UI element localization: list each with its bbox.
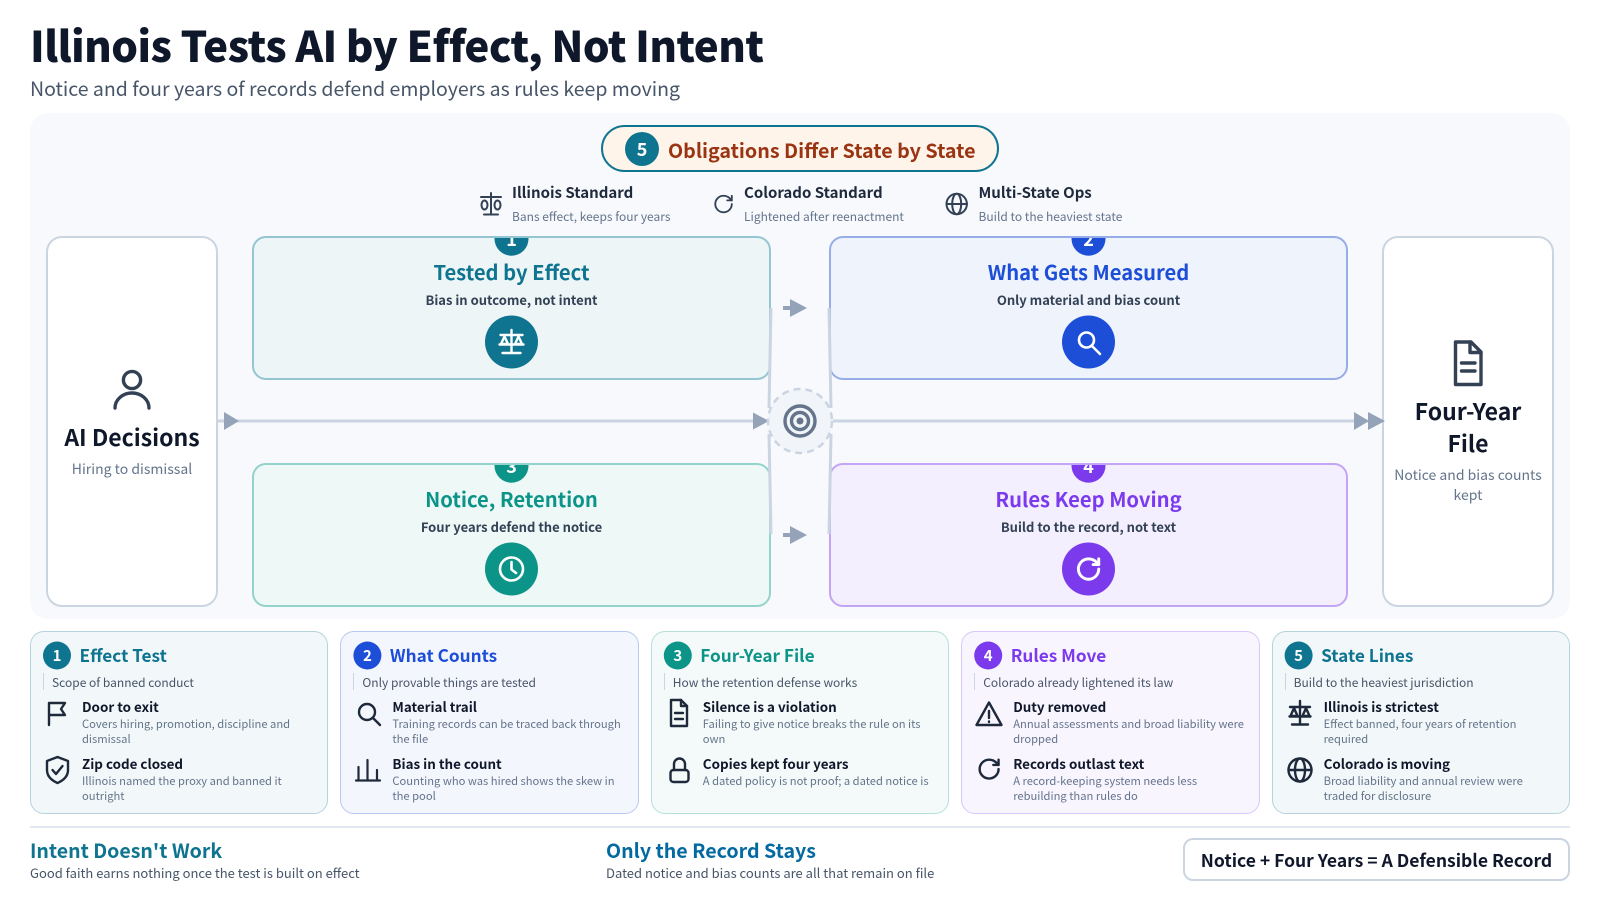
node: four-year file: Four-Year [1415, 393, 1521, 427]
item: Illinois is strictest: Effect banned, four years of retention [1324, 716, 1516, 732]
item: door to exit [48, 696, 290, 747]
panel: 4 rules move: 4 [984, 645, 993, 666]
panel: 1 effect test: Scope of banned conduct [52, 674, 194, 691]
node: four-year file [1382, 236, 1554, 607]
item: duty removed: Annual assessments and broad liability were [1013, 716, 1244, 732]
stage card 1: tested by effect [252, 236, 771, 380]
panel: main diagram [30, 113, 1570, 619]
item: silence is a violation: Silence is a violation [703, 696, 837, 716]
item: material trail: Training records can be traced back through [392, 716, 621, 732]
item: Colorado is moving: Broad liability and annual review were [1324, 773, 1523, 789]
panel: 2 what counts [340, 631, 639, 814]
header pill: obligations differ state by state: Obligations Differ State by State [668, 135, 976, 164]
node: AI decisions: Hiring to dismissal [72, 459, 192, 479]
stage card 4: rules keep moving: Build to the record, not text [1001, 517, 1176, 536]
panel: 4 rules move: Rules Move [1011, 642, 1106, 667]
legend item: Colorado standard [714, 182, 904, 225]
title: Illinois Tests AI by Effect, Not Intent [30, 14, 764, 75]
panel: 3 four-year file: Four-Year File [700, 642, 815, 667]
item: copies kept four years: A dated policy is not proof; a dated notice is [703, 773, 929, 789]
item: Illinois is strictest: required [1324, 731, 1368, 747]
panel: 4 rules move [961, 631, 1260, 814]
item: material trail [358, 696, 621, 747]
panel: 3 four-year file: How the retention defense works [673, 674, 857, 691]
stage card 2: what gets measured: What Gets Measured [988, 257, 1189, 286]
takeaway: only the record stays: Only the Record Stays [606, 835, 816, 864]
stage card 3: notice, retention: Four years defend the notice [421, 517, 602, 536]
item: zip code closed: Zip code closed [82, 753, 183, 773]
item: bias in the count: the pool [392, 788, 436, 804]
item: material trail: the file [392, 731, 428, 747]
takeaway: only the record stays [606, 835, 934, 882]
stage card 3: notice, retention: Notice, Retention [425, 484, 598, 513]
legend item: Colorado standard: Lightened after reenactment [744, 208, 904, 225]
header pill: obligations differ state by state [601, 125, 999, 172]
stage card 4: rules keep moving: Rules Keep Moving [995, 484, 1182, 513]
item: Colorado is moving: traded for disclosure [1324, 788, 1431, 804]
node: AI decisions [46, 236, 218, 607]
legend item: multi-state ops: Multi-State Ops [978, 182, 1092, 203]
stage card 3: notice, retention [252, 463, 771, 607]
takeaway: only the record stays: Dated notice and bias counts are all that remain on file [606, 863, 934, 882]
subtitle: Notice and four years of records defend employers as rules keep moving [30, 73, 680, 102]
item: bias in the count: Counting who was hired shows the skew in [392, 773, 615, 789]
item: copies kept four years [669, 753, 929, 789]
legend item: Illinois standard: Bans effect, keeps four years [512, 208, 670, 225]
stage card 2: what gets measured: Only material and bias count [997, 290, 1180, 309]
node: four-year file: File [1447, 425, 1489, 459]
node: four-year file: kept [1454, 485, 1482, 505]
item: zip code closed [46, 753, 282, 804]
item: material trail: Material trail [392, 696, 477, 716]
panel: 2 what counts: What Counts [390, 642, 497, 667]
callout: formula: Notice + Four Years = A Defensible Record [1201, 848, 1552, 873]
item: door to exit: dismissal [82, 731, 131, 747]
panel: 2 what counts: 2 [363, 645, 372, 666]
item: duty removed [975, 696, 1244, 747]
stage card 1: tested by effect: Tested by Effect [434, 257, 589, 286]
item: bias in the count [354, 753, 615, 804]
item: records outlast text: A record-keeping system needs less [1013, 773, 1197, 789]
item: records outlast text: Records outlast text [1013, 753, 1144, 773]
legend item: multi-state ops: Build to the heaviest state [978, 208, 1122, 225]
panel: 3 four-year file: 3 [673, 645, 682, 666]
node: AI decisions: AI Decisions [64, 419, 200, 453]
item: silence is a violation: Failing to give notice breaks the rule on its [703, 716, 920, 732]
panel: 5 state lines [1272, 631, 1570, 814]
takeaway: intent doesn't work [30, 835, 360, 882]
panel: 1 effect test: Effect Test [80, 642, 167, 667]
header pill: obligations differ state by state: 5 [637, 136, 647, 162]
item: duty removed: dropped [1013, 731, 1058, 747]
panel: 2 what counts: Only provable things are tested [362, 674, 536, 691]
takeaway: intent doesn't work: Intent Doesn't Work [30, 835, 222, 864]
item: silence is a violation: own [703, 731, 725, 747]
item: Illinois is strictest: Illinois is strictest [1324, 696, 1439, 716]
panel: 1 effect test: 1 [53, 645, 61, 666]
stage card 4: rules keep moving [829, 463, 1348, 607]
takeaway: intent doesn't work: Good faith earns nothing once the test is built on effect [30, 863, 360, 882]
item: zip code closed: outright [82, 788, 125, 804]
item: records outlast text: rebuilding than rules do [1013, 788, 1138, 804]
stage card 1: tested by effect: Bias in outcome, not intent [425, 290, 598, 309]
item: door to exit: Door to exit [82, 696, 159, 716]
item: zip code closed: Illinois named the proxy and banned it [82, 773, 282, 789]
callout: formula [1183, 838, 1570, 881]
item: records outlast text [978, 753, 1197, 804]
legend item: Colorado standard: Colorado Standard [744, 182, 883, 203]
stage card 2: what gets measured [829, 236, 1348, 380]
item: copies kept four years: Copies kept four years [703, 753, 849, 773]
legend item: Illinois standard [480, 182, 670, 225]
legend item: multi-state ops [946, 182, 1122, 225]
item: Illinois is strictest [1288, 696, 1516, 747]
item: silence is a violation [670, 696, 920, 747]
panel: 4 rules move: Colorado already lightened its law [983, 674, 1173, 691]
item: Colorado is moving: Colorado is moving [1324, 753, 1450, 773]
item: bias in the count: Bias in the count [392, 753, 502, 773]
panel: 5 state lines: 5 [1294, 645, 1303, 666]
item: door to exit: Covers hiring, promotion, discipline and [82, 716, 290, 732]
panel: 1 effect test [30, 631, 328, 814]
panel: 3 four-year file [651, 631, 949, 814]
panel: 5 state lines: Build to the heaviest jurisdiction [1294, 674, 1474, 691]
legend item: Illinois standard: Illinois Standard [512, 182, 633, 203]
item: Colorado is moving [1287, 753, 1523, 804]
panel: 5 state lines: State Lines [1321, 642, 1413, 667]
item: duty removed: Duty removed [1013, 696, 1106, 716]
node: four-year file: Notice and bias counts [1394, 465, 1542, 485]
